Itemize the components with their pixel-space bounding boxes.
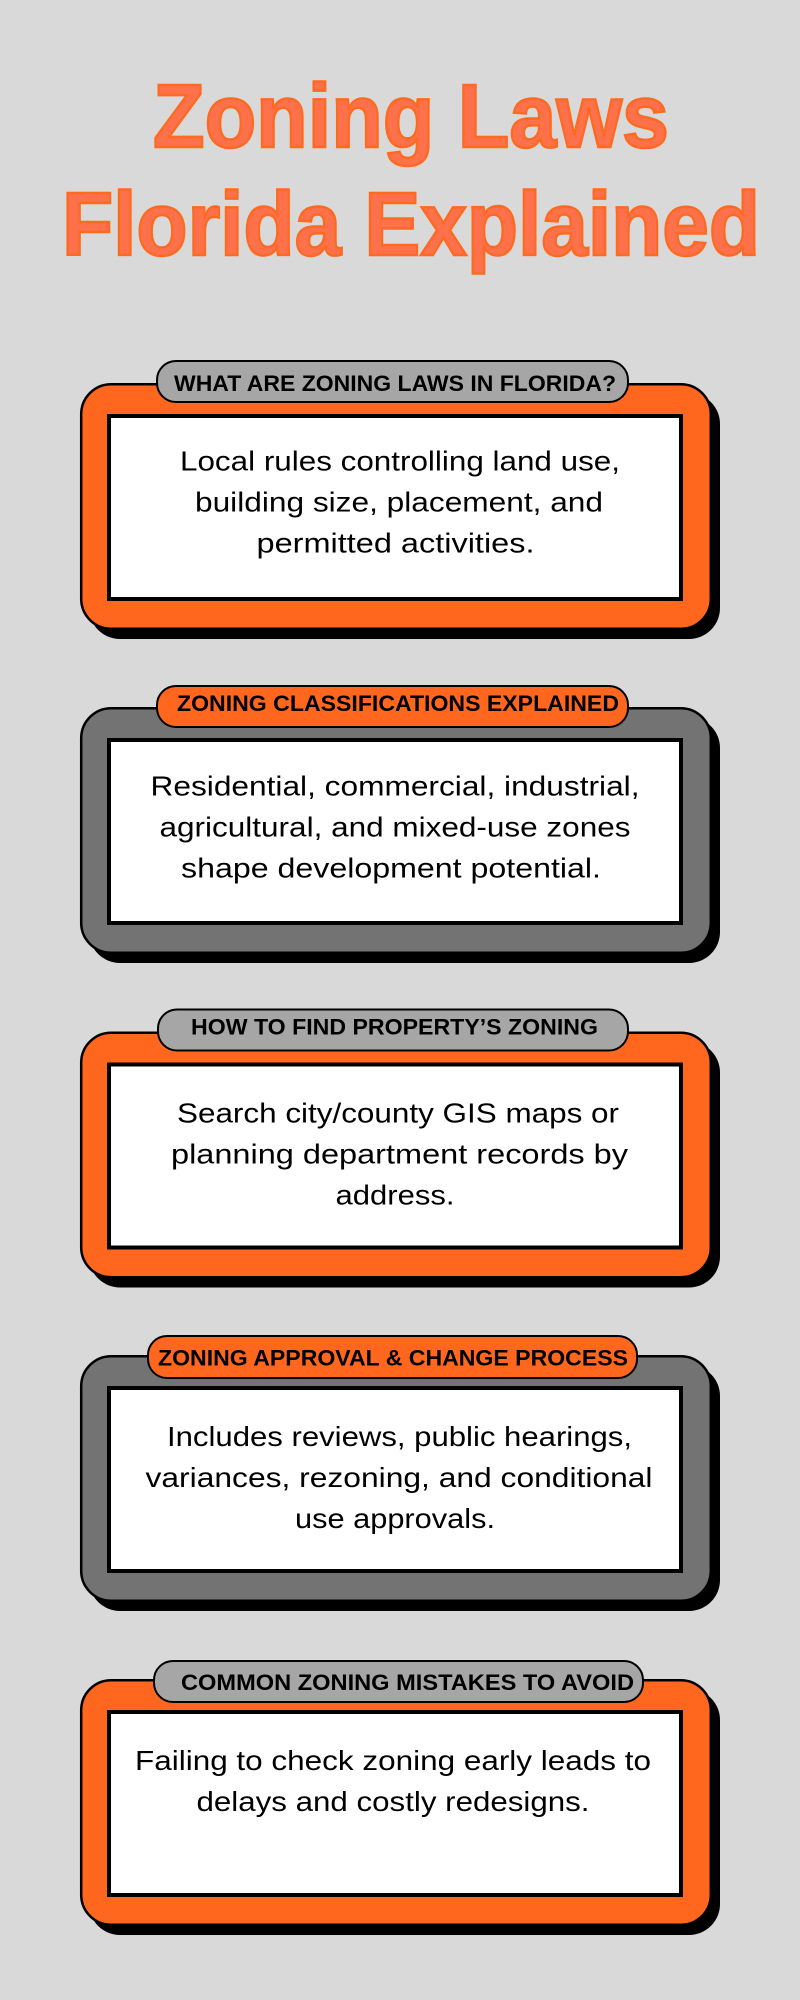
body text: Failing to check zoning early leads to bbox=[135, 1745, 651, 1776]
body text bbox=[180, 446, 620, 558]
pill heading: ZONING APPROVAL & CHANGE PROCESS bbox=[158, 1346, 628, 1370]
body text bbox=[135, 1745, 651, 1817]
pill heading bbox=[154, 1661, 643, 1702]
body text: shape development potential. bbox=[181, 852, 601, 884]
panel: approval process bbox=[81, 1336, 720, 1611]
body text bbox=[146, 1421, 652, 1534]
pill heading: COMMON ZONING MISTAKES TO AVOID bbox=[181, 1670, 634, 1695]
pill heading: HOW TO FIND PROPERTY’S ZONING bbox=[191, 1014, 598, 1040]
pill heading bbox=[148, 1336, 637, 1378]
body text: permitted activities. bbox=[256, 528, 534, 558]
pill heading bbox=[157, 686, 628, 727]
body text bbox=[171, 1098, 628, 1210]
title bbox=[62, 67, 760, 275]
body text: variances, rezoning, and conditional bbox=[146, 1462, 652, 1493]
body text: delays and costly redesigns. bbox=[196, 1786, 590, 1817]
panel: what are zoning laws bbox=[81, 361, 720, 639]
title: Zoning Laws bbox=[153, 67, 669, 167]
pill heading bbox=[157, 361, 628, 402]
panel: how to find zoning bbox=[81, 1010, 720, 1288]
body text: Includes reviews, public hearings, bbox=[167, 1421, 632, 1452]
body text: Local rules controlling land use, bbox=[180, 446, 620, 476]
body text: Search city/county GIS maps or bbox=[177, 1098, 619, 1128]
body text: Residential, commercial, industrial, bbox=[150, 770, 640, 802]
body text bbox=[150, 770, 640, 884]
pill heading bbox=[158, 1010, 628, 1050]
title: Florida Explained bbox=[62, 175, 760, 275]
panel: common mistakes bbox=[81, 1661, 720, 1935]
body text: planning department records by bbox=[171, 1138, 628, 1170]
panel: zoning classifications bbox=[81, 686, 720, 963]
body text: agricultural, and mixed-use zones bbox=[160, 812, 630, 842]
body text: address. bbox=[336, 1180, 454, 1210]
pill heading: ZONING CLASSIFICATIONS EXPLAINED bbox=[177, 691, 619, 716]
pill heading: WHAT ARE ZONING LAWS IN FLORIDA? bbox=[174, 371, 616, 396]
body text: use approvals. bbox=[295, 1503, 495, 1534]
body text: building size, placement, and bbox=[195, 486, 603, 518]
